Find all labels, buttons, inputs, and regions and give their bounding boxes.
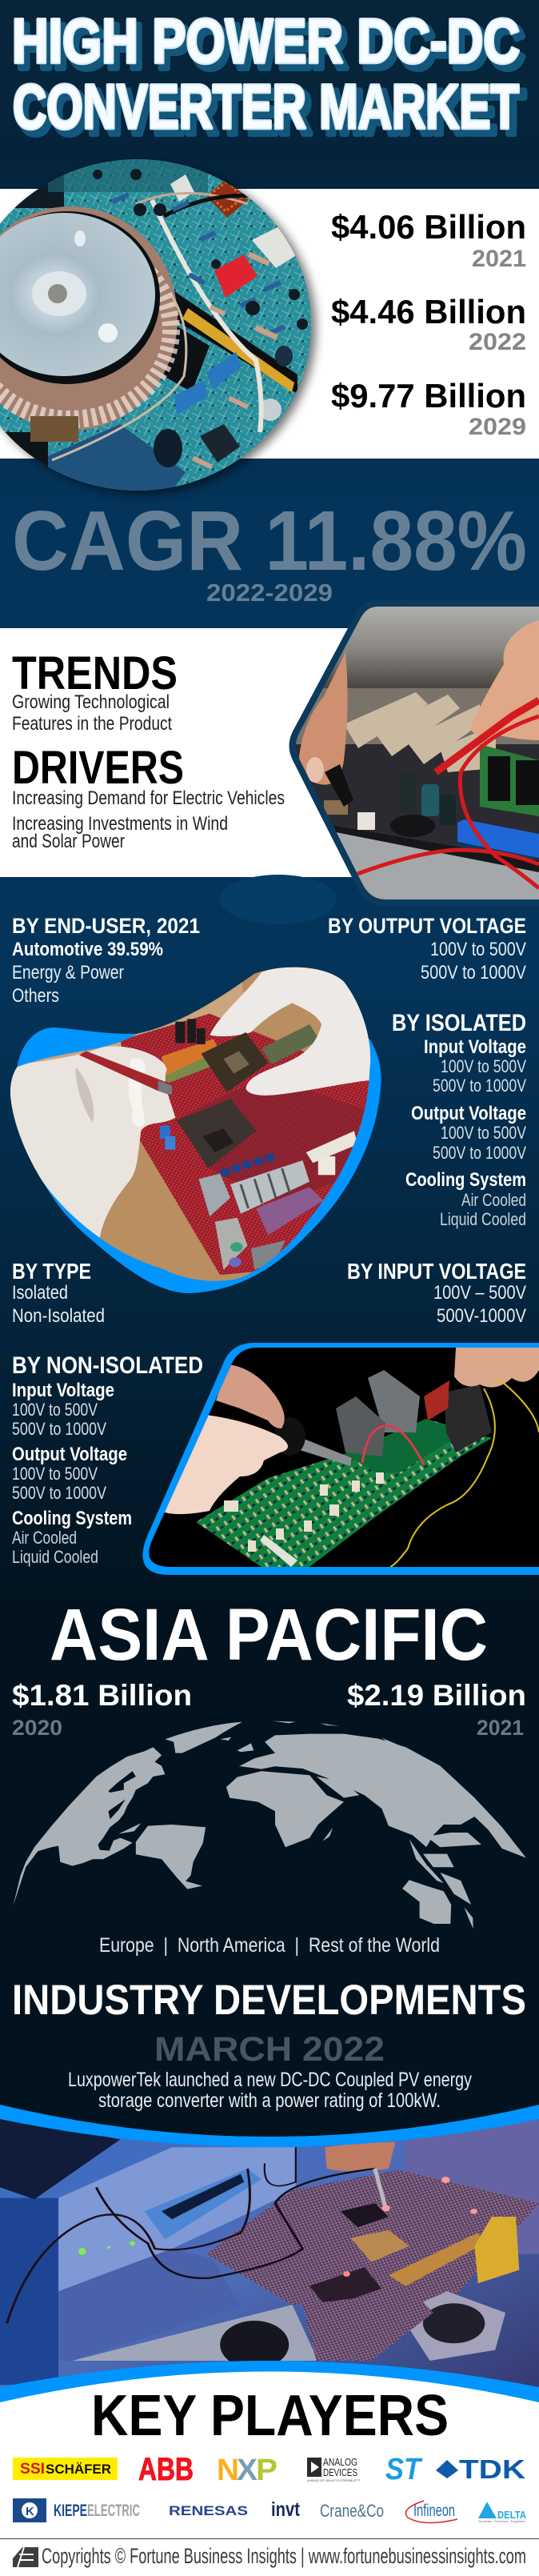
purple connector	[256, 1187, 323, 1235]
soldering iron	[300, 1439, 352, 1466]
eurasia	[239, 1734, 526, 1858]
image: gloved hands on red motherboard	[0, 960, 385, 1293]
2021 value: $4.06 Billion	[331, 208, 526, 246]
blue blob	[18, 1028, 381, 1293]
logo: Analog Devices: DEVICES	[323, 2466, 357, 2478]
logo: Kiepe Electric: ELECTRIC	[87, 2502, 140, 2520]
image: transformer and circuit board	[0, 152, 328, 496]
madagascar	[322, 1828, 333, 1841]
logo: Kiepe Electric: KIEPE	[54, 2502, 87, 2520]
africa	[226, 1771, 344, 1847]
development date: MARCH 2022	[154, 2030, 385, 2069]
ic chip	[200, 424, 240, 463]
trends text: Features in the Product	[12, 713, 172, 735]
segment: by end-user	[12, 914, 200, 1007]
logo: SSI Schaefer	[13, 2458, 118, 2480]
bottom-left device	[72, 2305, 318, 2361]
logo: NXP: N	[217, 2454, 239, 2487]
2029 value: 2029	[469, 414, 526, 440]
image: hands testing motherboard	[288, 600, 539, 906]
faint glow below photo	[220, 875, 337, 924]
red probe and wires	[436, 700, 539, 772]
drivers text	[12, 787, 285, 852]
stylus	[79, 1051, 172, 1095]
segment: by non-isolated: Cooling System	[12, 1508, 132, 1529]
electrolytic	[154, 429, 182, 467]
logo: SSI Schaefer: SSI	[20, 2461, 45, 2478]
trends heading: TRENDS	[12, 647, 178, 699]
region value 2021: $2.19 Billion	[347, 1679, 526, 1712]
blue caps row	[220, 1153, 275, 1176]
logo: Crane and Co: Crane&Co	[320, 2501, 384, 2521]
title	[12, 6, 525, 147]
beige slots	[344, 692, 496, 772]
image: soldering green circuit board	[142, 1343, 539, 1575]
logo: Infineon: Infineon	[413, 2502, 455, 2520]
uk iceland	[238, 1743, 254, 1752]
logo: NXP: X	[237, 2454, 258, 2487]
2029 value: $9.77 Billion	[331, 377, 526, 415]
world map globe	[13, 1721, 526, 1929]
drivers heading: DRIVERS	[12, 742, 184, 794]
logo: Analog Devices: AHEAD OF WHAT'S POSSIBLE™	[307, 2478, 360, 2482]
footer logo icon	[13, 2547, 38, 2567]
hand	[325, 2142, 395, 2171]
blue capacitors	[160, 1126, 170, 1139]
region value 2020: 2020	[12, 1716, 62, 1740]
2022 value: $4.46 Billion	[331, 293, 526, 331]
CAGR period: 2022-2029	[206, 579, 333, 607]
left glove	[0, 1046, 175, 1238]
logo: Infineon	[406, 2501, 457, 2523]
copper ring	[0, 206, 178, 431]
drivers text: Increasing Investments in Wind	[12, 813, 228, 835]
segment: by non-isolated	[12, 1352, 203, 1567]
copper coil	[206, 178, 248, 218]
logo: NXP	[217, 2454, 277, 2487]
segment: by type: BY TYPE	[12, 1259, 91, 1284]
southeast asia islands	[409, 1839, 444, 1883]
segment: by non-isolated: 500V to 1000V	[12, 1483, 106, 1503]
red board	[120, 1014, 375, 1275]
logo: ABB: ABB	[138, 2452, 194, 2487]
logo: Delta	[478, 2502, 527, 2523]
drivers text: Increasing Demand for Electric Vehicles	[12, 787, 285, 809]
white block	[252, 227, 296, 268]
segment: by input voltage	[347, 1259, 526, 1327]
logo: NXP: P	[256, 2454, 277, 2487]
small components	[112, 192, 285, 336]
logo: Delta: Smarter. Greener. Together.	[478, 2519, 526, 2523]
wires	[152, 200, 262, 432]
south america	[136, 1825, 206, 1889]
yellow wire	[390, 1378, 539, 1567]
logo: Analog Devices: ANALOG	[323, 2456, 357, 2468]
blue connector	[457, 819, 539, 858]
right fingers	[454, 1348, 539, 1388]
fan	[399, 2291, 505, 2361]
segment: by non-isolated: 100V to 500V	[12, 1464, 98, 1484]
2021 value	[331, 208, 526, 272]
greenland	[165, 1722, 242, 1753]
region value 2020: $1.81 Billion	[12, 1679, 192, 1712]
wires	[7, 2169, 250, 2323]
memory slot	[162, 1039, 220, 1078]
segment: by non-isolated: BY NON-ISOLATED	[12, 1352, 203, 1379]
caribbean	[118, 1823, 141, 1834]
key players heading: KEY PLAYERS	[91, 2384, 449, 2448]
segment: by end-user: BY END-USER, 2021	[12, 914, 200, 938]
trends text	[12, 691, 172, 735]
red wire	[362, 1426, 424, 1464]
segment: by output voltage	[328, 914, 526, 984]
green board	[196, 1419, 492, 1567]
capacitors	[400, 774, 416, 814]
red capacitors	[214, 254, 258, 298]
capacitors top	[175, 1019, 206, 1044]
panel: key players	[0, 2361, 539, 2576]
socket	[177, 1099, 256, 1168]
2029 value	[331, 377, 526, 440]
right glove	[210, 967, 371, 1096]
silver ports	[215, 1218, 248, 1270]
other regions: Europe | North America | Rest of the World	[99, 1934, 440, 1957]
logo: TDK	[436, 2454, 525, 2484]
logo: Kiepe Electric: K	[26, 2505, 34, 2518]
trends text: Growing Technological	[12, 691, 170, 713]
left hand	[216, 1364, 285, 1428]
drivers text: and Solar Power	[12, 831, 125, 852]
segment: by non-isolated: 500V to 1000V	[12, 1419, 106, 1439]
logo: Delta: DELTA	[497, 2509, 527, 2521]
circuit board	[206, 2170, 539, 2305]
logo: invt: invt	[271, 2498, 301, 2521]
logo: TDK: TDK	[459, 2454, 525, 2484]
region value 2020	[12, 1679, 192, 1740]
green module	[480, 744, 539, 816]
panel: trends and drivers	[0, 628, 360, 877]
2022 value	[331, 293, 526, 355]
heat sinks	[230, 1160, 309, 1214]
segment: by non-isolated: Liquid Cooled	[12, 1547, 98, 1567]
segment: by end-user: Automotive 39.59%	[12, 939, 163, 960]
diag black band	[164, 290, 297, 394]
terminal block	[444, 1384, 492, 1452]
cpu chip	[202, 1032, 268, 1092]
segment: by type	[12, 1259, 105, 1327]
bottom left blue block	[48, 424, 186, 496]
segment: by isolated	[392, 1010, 526, 1229]
segment: by non-isolated: Input Voltage	[12, 1380, 114, 1401]
logo: Kiepe Electric	[13, 2498, 140, 2522]
laptop	[0, 2118, 120, 2199]
segment: by type: Non-Isolated	[12, 1305, 105, 1327]
device	[145, 2169, 262, 2239]
region value 2021: 2021	[477, 1716, 524, 1740]
segment: by non-isolated: Output Voltage	[12, 1444, 127, 1465]
batteries	[474, 2217, 519, 2283]
segment: by non-isolated: 100V to 500V	[12, 1400, 98, 1420]
segment: by type: Isolated	[12, 1282, 68, 1304]
glints	[381, 2205, 390, 2211]
blue capacitors	[206, 352, 242, 390]
region value 2021	[347, 1679, 526, 1740]
segment: by non-isolated: Air Cooled	[12, 1528, 77, 1548]
development text	[68, 2069, 472, 2112]
segment: by end-user: Energy & Power	[12, 962, 124, 984]
australia	[402, 1880, 451, 1924]
heat sinks	[368, 1370, 420, 1432]
development text: storage converter with a power rating of 100kW.	[98, 2089, 441, 2112]
hand left	[299, 652, 348, 785]
arctic	[273, 1721, 401, 1746]
2021 value: 2021	[472, 246, 526, 272]
region heading: ASIA PACIFIC	[50, 1594, 488, 1676]
logo: ST: ST	[385, 2453, 423, 2486]
2022 value: 2022	[469, 329, 526, 355]
panel: market size values	[0, 189, 539, 459]
hand right	[470, 620, 539, 740]
logo: SSI Schaefer: SCHÄFER	[46, 2462, 111, 2477]
north america	[13, 1747, 165, 1906]
logo: Renesas: RENESAS	[169, 2503, 248, 2518]
probe	[325, 764, 353, 807]
segment: by end-user: Others	[12, 985, 59, 1007]
logo: Analog Devices	[307, 2456, 360, 2482]
blue arc upper	[0, 2105, 539, 2147]
image: engineer probing circuit board	[0, 2113, 539, 2401]
light components	[224, 1472, 384, 1552]
white connector	[306, 1131, 357, 1163]
